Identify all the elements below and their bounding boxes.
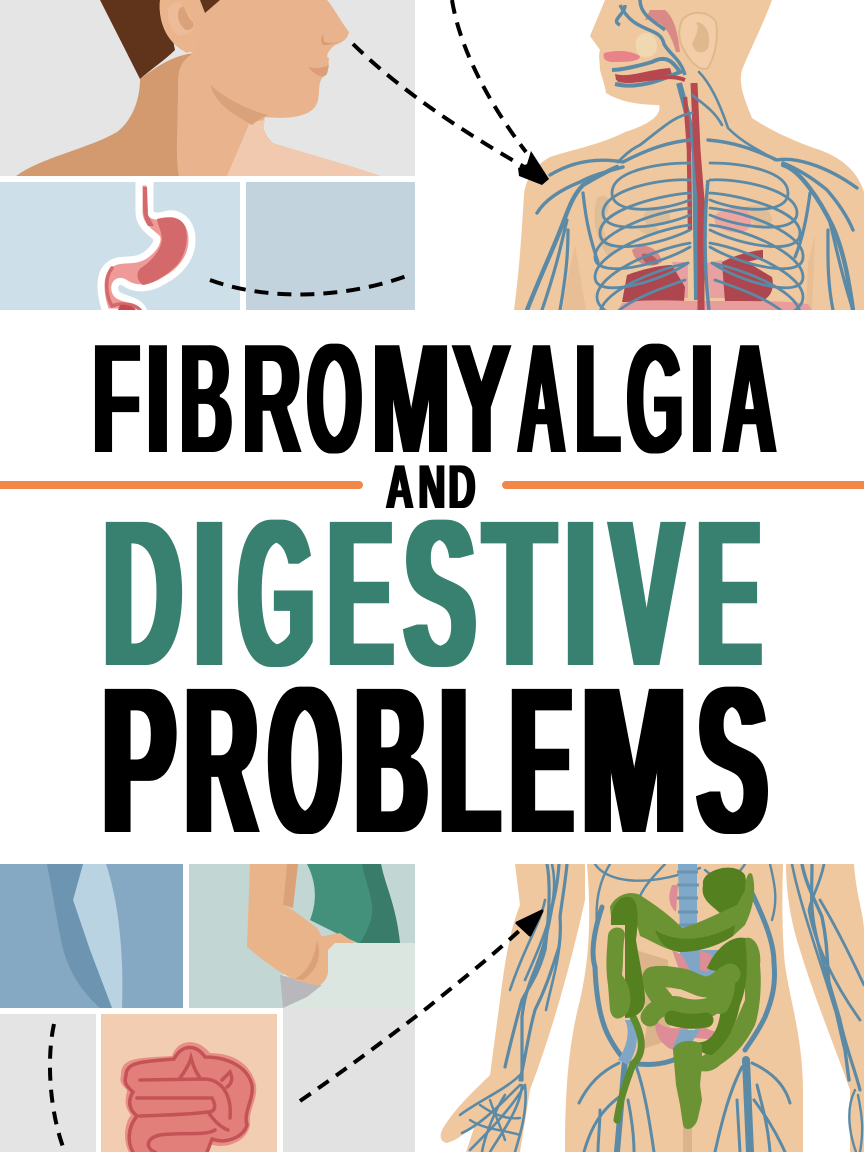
ascending colon bbox=[611, 897, 645, 1018]
title: FIBROMYALGIA: L bbox=[575, 311, 620, 487]
spine vessels bbox=[679, 83, 697, 300]
colon bbox=[606, 868, 761, 1129]
title: DIGESTIVE: T bbox=[484, 475, 555, 711]
left arm bbox=[441, 864, 585, 1152]
title: PROBLEMS: O bbox=[269, 642, 341, 878]
nose and lips bbox=[321, 34, 344, 45]
arrow: dashed curve from nose to chest bbox=[353, 44, 526, 168]
title: PROBLEMS: R bbox=[185, 642, 258, 878]
arrow: dashed curve bbox=[50, 1024, 65, 1152]
icon: intestines bbox=[120, 1042, 256, 1152]
ear bbox=[679, 13, 717, 69]
chest highlight bbox=[227, 120, 380, 176]
arrow: dashed curve in stomach panel bbox=[210, 274, 412, 294]
teal shirt bbox=[307, 864, 400, 943]
subheading: AND: AND bbox=[386, 453, 475, 522]
transverse colon bbox=[610, 873, 754, 952]
panel: upper body nervous system bbox=[514, 0, 864, 312]
text: S bbox=[698, 642, 767, 878]
inner shading bbox=[636, 950, 670, 1050]
wrist and fold shading bbox=[283, 864, 319, 980]
title: FIBROMYALGIA: M bbox=[372, 311, 450, 487]
right arm bbox=[786, 864, 864, 1152]
title: PROBLEMS: P bbox=[102, 642, 175, 878]
text: E bbox=[698, 475, 760, 711]
title: PROBLEMS: L bbox=[440, 642, 499, 878]
title: DIGESTIVE bbox=[104, 475, 761, 711]
torso nerves bbox=[579, 864, 790, 1152]
title: FIBROMYALGIA: I bbox=[146, 311, 170, 487]
arrow: dashed line to lower arm bbox=[300, 930, 520, 1101]
pale organs bbox=[594, 196, 772, 258]
grey shadow wedge bbox=[280, 975, 322, 1008]
text: A bbox=[723, 311, 776, 487]
panel: lower body nervous and digestive system bbox=[441, 864, 864, 1152]
title: PROBLEMS: M bbox=[581, 642, 687, 878]
descending colon bbox=[701, 938, 761, 1072]
icon: stomach bbox=[101, 182, 192, 312]
front of neck and face bbox=[160, 0, 380, 176]
arrow: arrowhead top bbox=[518, 151, 549, 185]
pink organs around spine bbox=[672, 260, 727, 298]
title: PROBLEMS bbox=[102, 642, 767, 878]
panel: intestines bbox=[101, 1014, 277, 1152]
title: DIGESTIVE: S bbox=[405, 475, 475, 711]
title: FIBROMYALGIA: A bbox=[518, 311, 565, 487]
title: FIBROMYALGIA: Y bbox=[452, 311, 511, 487]
arrow: dashed curve from top to chest bbox=[452, 0, 526, 152]
sigmoid and rectum bbox=[673, 1041, 702, 1129]
title: FIBROMYALGIA: G bbox=[627, 311, 683, 487]
ear bbox=[160, 0, 200, 53]
title: PROBLEMS: B bbox=[355, 642, 427, 878]
small intestine loops bbox=[650, 974, 730, 1017]
jaw shadow bbox=[210, 84, 268, 125]
icon: fist bbox=[247, 864, 328, 985]
hair bbox=[100, 0, 175, 79]
ribs right bbox=[710, 163, 803, 312]
back hair tuft bbox=[200, 0, 220, 13]
mouth and sinus bbox=[603, 51, 640, 62]
title: FIBROMYALGIA: F bbox=[93, 311, 140, 487]
ribs left bbox=[595, 163, 690, 312]
panel: grey lower right bbox=[283, 1008, 415, 1152]
panel: hand on abdomen bbox=[189, 864, 415, 1008]
panel: blue abstract bbox=[0, 864, 183, 1008]
panel: stomach bbox=[0, 182, 415, 312]
panel: face profile bbox=[0, 0, 415, 176]
title: DIGESTIVE: I bbox=[195, 475, 224, 711]
title: FIBROMYALGIA bbox=[93, 311, 776, 487]
lungs and abdomen organs bbox=[622, 265, 685, 302]
shoulder and back of neck bbox=[16, 53, 240, 176]
title: DIGESTIVE: I bbox=[566, 475, 595, 711]
title: DIGESTIVE: V bbox=[611, 475, 682, 711]
title: FIBROMYALGIA: R bbox=[243, 311, 301, 487]
spine bbox=[678, 864, 697, 935]
decorative orange line left bbox=[0, 481, 363, 489]
arrow: arrowhead bottom bbox=[517, 911, 542, 935]
arm nerves bbox=[460, 864, 864, 1152]
torso bbox=[565, 864, 803, 1152]
neck and shoulder trunks bbox=[527, 72, 857, 310]
body silhouette bbox=[514, 0, 864, 310]
title: FIBROMYALGIA: O bbox=[307, 311, 362, 487]
appendix tube bbox=[617, 1017, 641, 1120]
title: FIBROMYALGIA: B bbox=[180, 311, 232, 487]
title: FIBROMYALGIA: I bbox=[690, 311, 714, 487]
upper right dark lobe bbox=[703, 868, 746, 915]
kidneys and pelvic organs bbox=[680, 950, 718, 976]
decorative orange line right bbox=[502, 481, 864, 489]
title: DIGESTIVE: G bbox=[239, 475, 314, 711]
title: PROBLEMS: E bbox=[511, 642, 572, 878]
torso side shading bbox=[563, 235, 815, 310]
title: DIGESTIVE: E bbox=[328, 475, 393, 711]
panel: grey lower left bbox=[0, 1014, 96, 1152]
title: DIGESTIVE: D bbox=[104, 475, 182, 711]
thumb bbox=[318, 933, 355, 950]
